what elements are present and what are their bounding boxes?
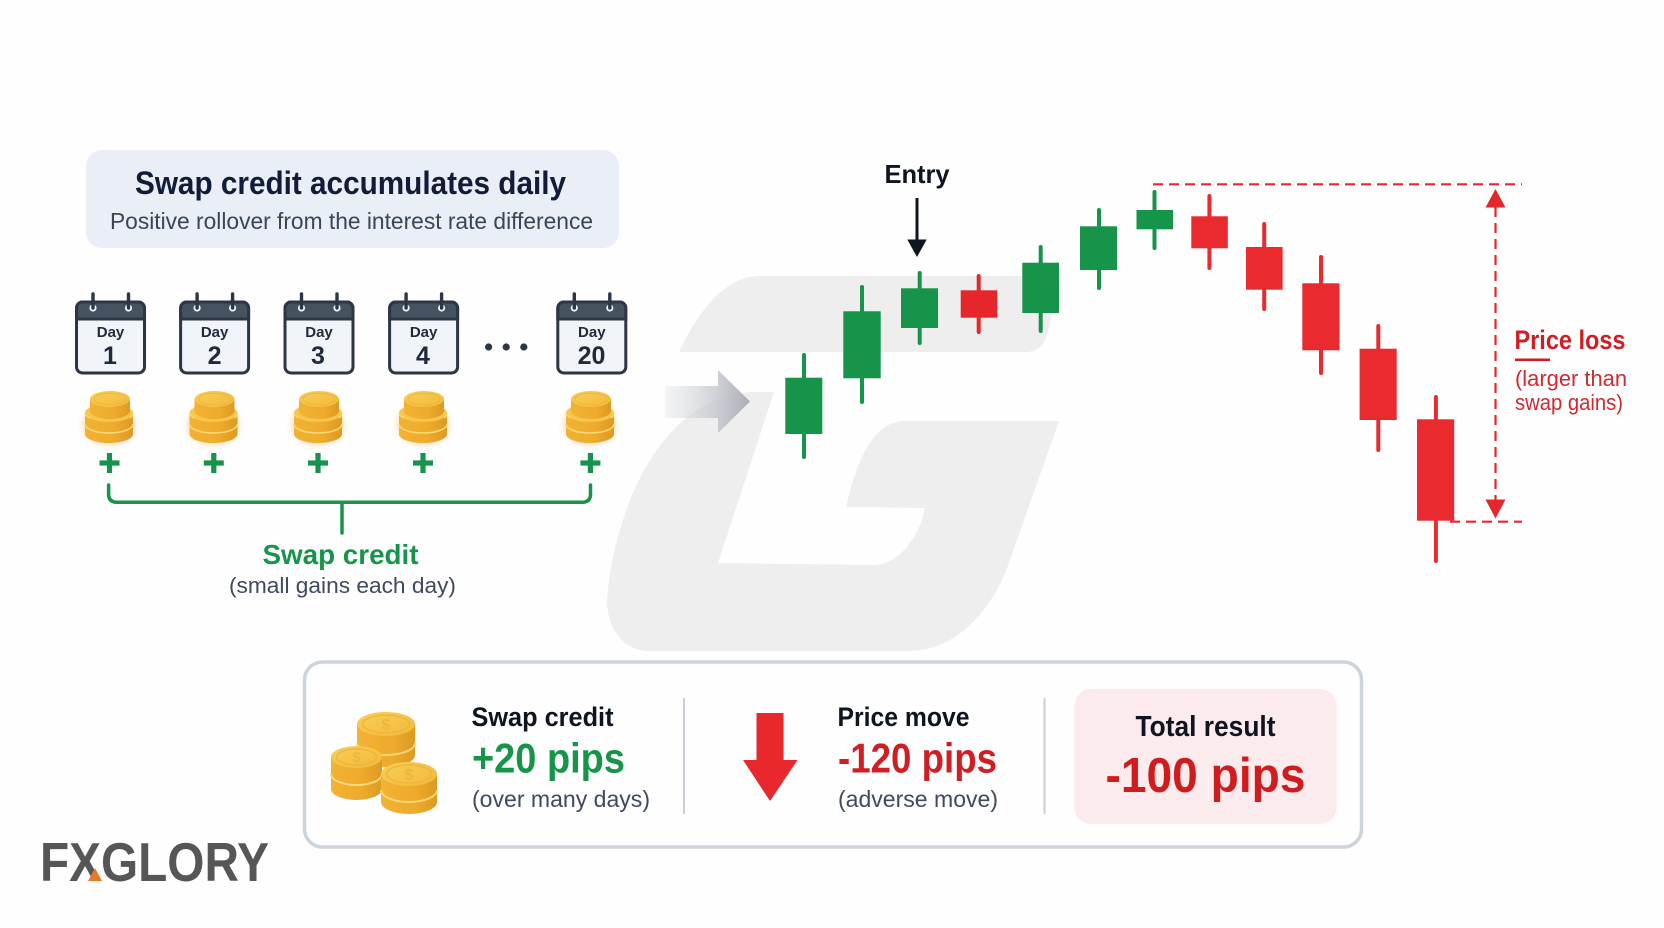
panel: swap credit header — [86, 150, 619, 248]
calendar: day 4: Day — [410, 324, 438, 341]
ellipsis dots — [485, 343, 527, 351]
candle 6 — [1080, 210, 1117, 288]
icon: daily coin stacks — [84, 391, 615, 444]
calendar: day 4 — [390, 294, 458, 373]
calendar: day 2: 2 — [208, 342, 222, 370]
swap credit label — [229, 539, 456, 598]
price move summary: Price move — [838, 702, 970, 732]
calendar: day 20: 20 — [578, 342, 605, 370]
icon: large coin stacks: $ — [352, 749, 361, 766]
candle 9 — [1246, 224, 1283, 309]
candle 11 — [1360, 326, 1397, 450]
price loss range marker — [1153, 184, 1522, 522]
entry label and arrow: Entry — [884, 159, 950, 189]
swap credit summary: (over many days) — [472, 786, 650, 812]
calendar: day 20 — [558, 294, 626, 373]
icon: red down arrow — [743, 713, 798, 801]
calendar: day 2 — [181, 294, 249, 373]
candlestick chart — [785, 192, 1454, 561]
heading: Swap credit accumulates daily — [135, 165, 566, 201]
candle 8 — [1191, 196, 1228, 268]
calendar: day 3 — [285, 294, 353, 373]
swap credit summary: Swap credit — [472, 702, 614, 732]
candle 3 — [901, 273, 938, 343]
price move summary: -120 pips — [838, 734, 997, 782]
price loss label — [1514, 325, 1627, 415]
icon: large coin stacks: $ — [382, 717, 391, 734]
candle 12 — [1417, 397, 1454, 561]
icon: large coin stacks: $ — [405, 767, 414, 784]
price move summary: (adverse move) — [838, 786, 998, 812]
subheading: Positive rollover from the interest rate difference — [110, 208, 593, 234]
calendar: day 1: Day — [97, 324, 125, 341]
candle 4 — [961, 276, 997, 332]
candle 10 — [1302, 257, 1340, 373]
total result box — [1074, 689, 1337, 824]
price loss label: (larger than — [1515, 366, 1627, 391]
price loss label: Price loss — [1514, 325, 1626, 355]
logo: FXGLORY — [40, 831, 269, 893]
entry label and arrow — [884, 159, 950, 257]
candle 1 — [785, 355, 822, 457]
swap credit summary: +20 pips — [472, 734, 625, 782]
panel: summary — [304, 662, 1362, 847]
watermark logo — [607, 276, 1061, 651]
calendar: day 2: Day — [201, 324, 229, 341]
bracket — [109, 485, 590, 533]
candle 5 — [1022, 247, 1059, 331]
candle 2 — [843, 287, 881, 402]
calendar: day 20: Day — [578, 324, 606, 341]
plus signs — [100, 453, 600, 473]
calendar: day 1: 1 — [103, 342, 117, 370]
swap credit label: (small gains each day) — [229, 573, 456, 598]
calendar: day 1 — [76, 294, 144, 373]
swap credit label: Swap credit — [262, 539, 418, 570]
icon: large coin stacks — [331, 712, 437, 814]
calendar: day 4: 4 — [416, 342, 430, 370]
arrow: flow to chart — [665, 370, 750, 433]
total result box: Total result — [1136, 711, 1276, 743]
calendar: day 3: Day — [305, 324, 333, 341]
price loss label: swap gains) — [1515, 390, 1623, 415]
calendar: day 3: 3 — [311, 342, 325, 370]
candle 7 — [1136, 192, 1173, 248]
swap credit summary — [472, 702, 650, 812]
total result box: -100 pips — [1106, 749, 1306, 803]
price move summary — [838, 702, 998, 812]
